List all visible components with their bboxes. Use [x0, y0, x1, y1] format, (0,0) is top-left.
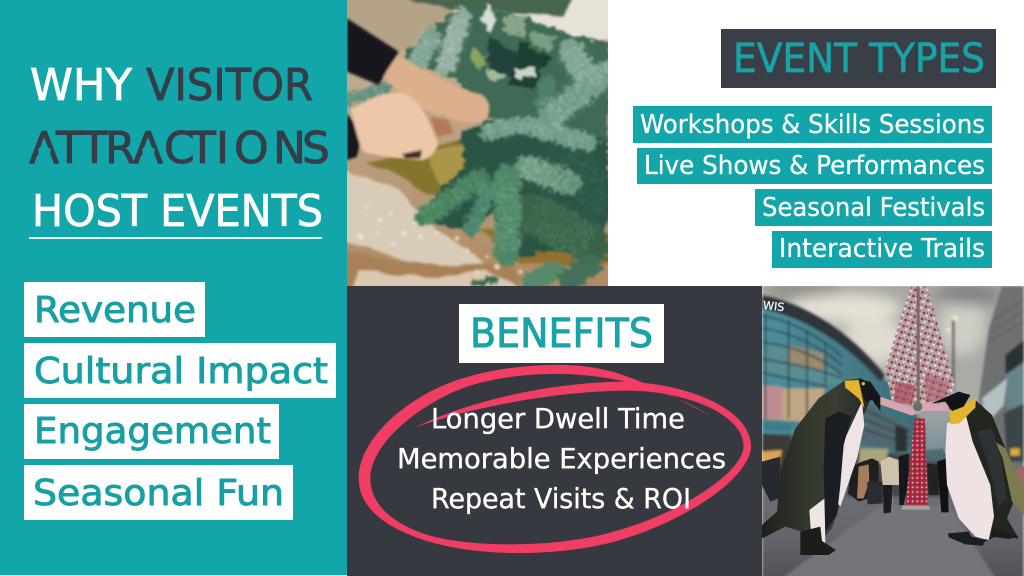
heading: why visitor attractions host events: HOST EVENTS — [32, 186, 323, 237]
label: revenue — [24, 282, 205, 337]
label: live shows and performances: Live Shows & Performances — [644, 151, 985, 181]
photo: hands arranging a foliage wreath — [340, 0, 620, 293]
heading: event types: EVENT TYPES — [733, 36, 985, 82]
panel: benefits — [347, 286, 762, 576]
heading: why visitor attractions host events: WHY — [30, 60, 132, 111]
text: benefits list: Repeat Visits & ROI — [431, 482, 691, 515]
text: benefits list: Longer Dwell Time — [431, 402, 685, 435]
heading: why visitor attractions host events: VISITOR — [146, 60, 313, 111]
red tree — [872, 287, 955, 510]
label: workshops and skills sessions: Workshops & Skills Sessions — [640, 110, 985, 140]
label: engagement: Engagement — [34, 411, 271, 452]
crowd — [762, 453, 1024, 513]
icon: hand-drawn red circle — [359, 365, 751, 553]
right building — [978, 286, 1024, 470]
panel: event types — [608, 0, 1024, 286]
heading: why visitor attractions host events — [29, 60, 330, 239]
fir fronds — [347, 17, 609, 283]
text: benefits list — [397, 402, 726, 515]
foliage mass — [404, 2, 609, 260]
hands — [384, 57, 489, 123]
text: benefits list: Memorable Experiences — [397, 442, 726, 475]
heading: why visitor attractions host events: ATTRACTIONS — [29, 123, 330, 174]
left building — [762, 295, 925, 462]
label: seasonal fun: Seasonal Fun — [33, 473, 284, 514]
photo: giant penguin sculptures in a shopping street — [762, 284, 1024, 576]
glitter — [357, 205, 522, 274]
label: seasonal festivals: Seasonal Festivals — [762, 193, 985, 223]
lamp — [952, 318, 955, 392]
penguin left — [762, 378, 880, 555]
heading: benefits: BENEFITS — [470, 311, 653, 357]
panel: title and reasons — [0, 0, 347, 575]
penguin right — [932, 392, 1024, 546]
sign lettering on building: WIS — [762, 298, 785, 314]
label: interactive trails: Interactive Trails — [779, 234, 985, 264]
label: cultural impact: Cultural Impact — [34, 351, 328, 392]
label: engagement — [24, 404, 279, 459]
label: revenue: Revenue — [34, 290, 196, 331]
sleeves — [347, 18, 399, 85]
label: cultural impact — [24, 343, 336, 398]
label: seasonal fun — [24, 465, 293, 520]
